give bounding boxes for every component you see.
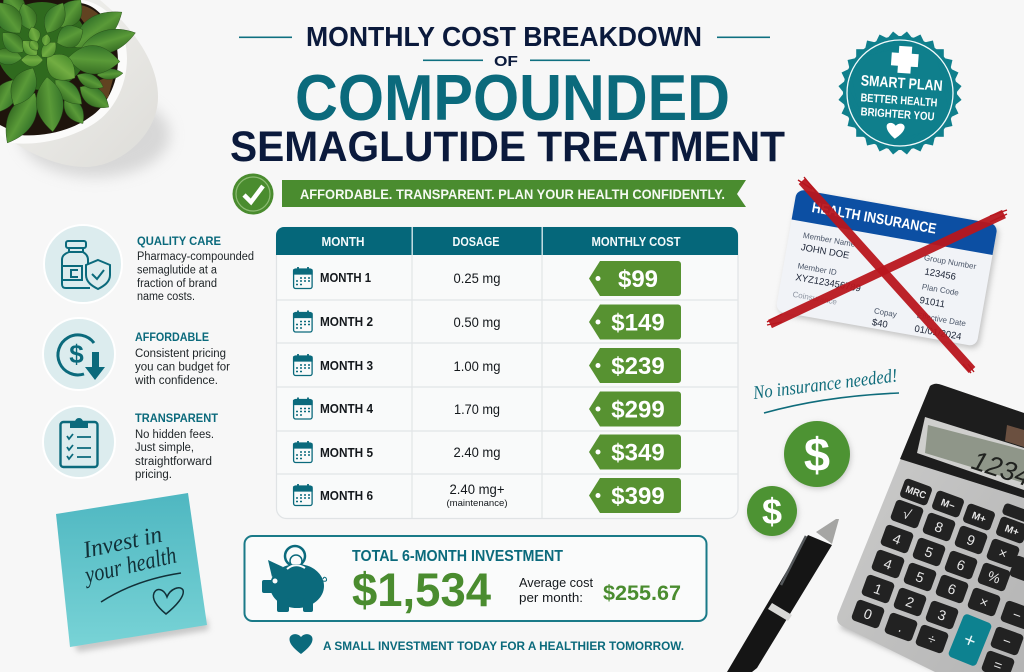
sticky note: your health (81, 543, 179, 589)
calculator: 4 (891, 530, 904, 548)
row: month 1: MONTH 1 (320, 271, 371, 285)
panel: total investment: TOTAL 6-MONTH INVESTMENT (352, 548, 563, 565)
affordable item: AFFORDABLE (135, 330, 209, 344)
row: month 3 (294, 348, 681, 383)
panel: cost table (276, 227, 738, 518)
row: month 2: 0.50 mg (454, 315, 500, 330)
note: no insurance needed: No insurance needed! (751, 365, 899, 404)
icon: heart (290, 634, 312, 654)
calculator: MRC (904, 484, 927, 502)
health insurance card: XYZ123456789 (795, 272, 862, 294)
calculator: % (985, 567, 1003, 587)
panel: total investment (244, 536, 706, 621)
panel: benefits list (43, 225, 254, 481)
calculator: √ (901, 505, 914, 523)
note: no insurance needed (751, 365, 899, 413)
transparent item: TRANSPARENT (135, 411, 219, 425)
transparent item: Just simple, (135, 442, 194, 454)
row: month 4: 1.70 mg (454, 402, 500, 417)
row: month 2 (294, 304, 681, 340)
calculator: 1 (872, 580, 885, 598)
icon: small dollar coin: $ (762, 491, 782, 532)
sticky note (56, 493, 209, 652)
calculator: 6 (946, 580, 959, 598)
quality care item: semaglutide at a (137, 264, 218, 276)
calculator (837, 384, 1024, 672)
quality care item: fraction of brand (137, 278, 217, 290)
row: month 5: 2.40 mg (454, 445, 500, 460)
badge: smart plan: BRIGHTER YOU (860, 106, 935, 123)
health insurance card: Member Name (802, 231, 856, 249)
affordable item: you can budget for (135, 362, 230, 374)
health insurance card: $40 (871, 317, 889, 331)
row: month 5: MONTH 5 (320, 446, 373, 460)
quality care item: QUALITY CARE (137, 234, 221, 248)
health insurance card: JOHN DOE (800, 242, 850, 262)
icon: piggy bank (262, 546, 327, 612)
health insurance card: 123456 (924, 266, 957, 283)
row: month 4: $299 (611, 396, 665, 424)
calculator: × (977, 593, 991, 611)
calculator: 5 (923, 543, 936, 561)
row: month 2: MONTH 2 (320, 315, 373, 329)
panel: total investment: Average cost (519, 575, 593, 590)
row: month 3: $239 (611, 353, 665, 380)
calculator: 0 (862, 605, 875, 623)
health insurance card: Member ID (797, 261, 838, 277)
calculator: M+ (1003, 523, 1020, 539)
calculator: 3 (936, 606, 949, 624)
quality care item: name costs. (137, 291, 195, 303)
table header: MONTH (322, 235, 364, 249)
closing message: A SMALL INVESTMENT TODAY FOR A HEALTHIER TOMORROW. (323, 639, 684, 653)
calculator: 4 (882, 555, 895, 573)
calculator: 5 (914, 568, 927, 586)
calculator: × (996, 544, 1010, 562)
potted succulent plant (0, 0, 170, 177)
row: month 6 (294, 478, 681, 513)
table header: DOSAGE (452, 235, 500, 249)
row: month 6: MONTH 6 (320, 489, 373, 503)
row: month 1 (294, 261, 681, 296)
badge: smart plan: SMART PLAN (860, 72, 943, 95)
health insurance card (775, 189, 1000, 350)
panel: total investment: $255.67 (603, 581, 681, 605)
title: MONTHLY COST BREAKDOWN (306, 21, 702, 52)
row: month 5 (294, 434, 681, 470)
quality care item (44, 225, 254, 303)
calculator: 8 (933, 518, 946, 536)
health insurance card: HEALTH INSURANCE (811, 200, 938, 238)
icon: green check circle (232, 174, 274, 214)
icon: small dollar coin (747, 486, 798, 538)
calculator: . (896, 619, 906, 635)
health insurance card: Effective Date (916, 311, 967, 328)
icon: large dollar coin (784, 421, 851, 489)
row: month 4 (294, 392, 681, 426)
transparent item: pricing. (135, 469, 172, 481)
tagline ribbon (282, 180, 746, 207)
affordable item: with confidence. (134, 375, 218, 387)
health insurance card: Copay (873, 306, 898, 319)
affordable item: $ (69, 339, 84, 369)
calculator: ÷ (926, 630, 939, 648)
health insurance card: 01/01/2024 (914, 324, 962, 343)
health insurance card: 91011 (919, 295, 946, 310)
health insurance card: Coinsurance (792, 290, 838, 307)
affordable item (43, 318, 230, 390)
row: month 1: $99 (618, 266, 658, 293)
row: month 6: $399 (611, 483, 665, 510)
red cross-out (767, 177, 1007, 373)
row: month 3: MONTH 3 (320, 359, 373, 373)
quality care item: Pharmacy-compounded (137, 251, 254, 263)
calculator: + (960, 629, 979, 653)
row: month 5: $349 (611, 440, 665, 466)
title: COMPOUNDED (295, 61, 730, 134)
icon: large dollar coin: $ (804, 428, 830, 481)
transparent item: No hidden fees. (135, 429, 214, 441)
title: SEMAGLUTIDE TREATMENT (230, 123, 785, 171)
sticky note: Invest in (80, 522, 164, 564)
row: month 3: 1.00 mg (454, 359, 500, 374)
row: month 6: 2.40 mg+ (450, 482, 505, 497)
row: month 2: $149 (611, 310, 665, 336)
panel: total investment: per month: (519, 590, 583, 605)
affordable item: Consistent pricing (135, 348, 226, 360)
calculator: M− (939, 497, 956, 513)
health insurance card: Group Number (923, 253, 977, 271)
title (230, 21, 785, 171)
transparent item (43, 406, 219, 481)
transparent item: straightforward (135, 456, 212, 468)
row: month 4: MONTH 4 (320, 402, 373, 416)
badge: smart plan (838, 31, 962, 155)
calculator: 9 (965, 531, 978, 549)
title: OF (494, 53, 518, 70)
calculator: − (1010, 606, 1024, 624)
pen (727, 519, 839, 672)
table header (276, 227, 738, 255)
calculator: M+ (970, 510, 987, 526)
badge: smart plan: BETTER HEALTH (860, 92, 938, 110)
row: month 6: (maintenance) (446, 498, 508, 509)
panel: total investment: $1,534 (352, 563, 491, 616)
table header: MONTHLY COST (592, 235, 681, 249)
calculator: − (1000, 632, 1014, 650)
row: month 1: 0.25 mg (454, 271, 500, 286)
tagline ribbon: AFFORDABLE. TRANSPARENT. PLAN YOUR HEALTH CONFIDENTLY. (300, 186, 725, 202)
calculator: 2 (904, 593, 917, 611)
calculator: 6 (955, 556, 968, 574)
health insurance card: Plan Code (921, 282, 960, 298)
